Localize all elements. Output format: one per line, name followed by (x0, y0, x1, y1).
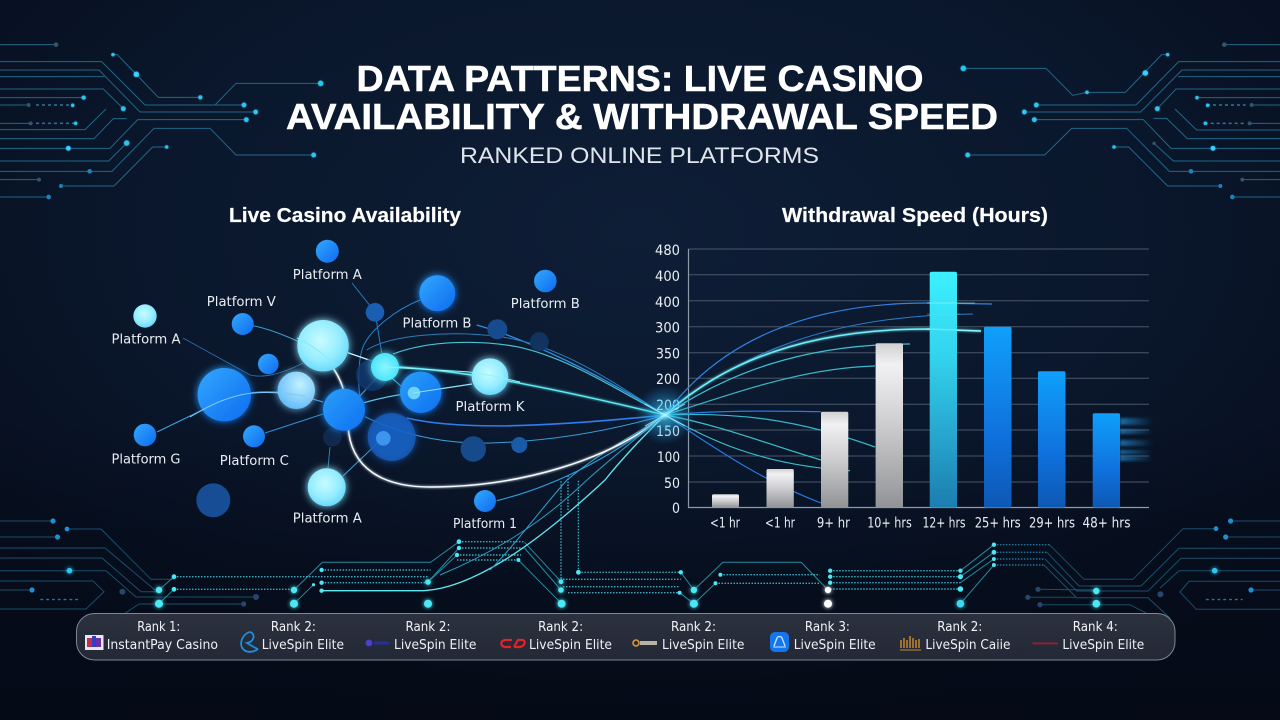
glowing blue nodes (198, 275, 455, 431)
x axis labels: 29+ hrs (1029, 516, 1075, 532)
rank 2: Rank 2: (538, 619, 583, 635)
circuit traces: bottom left and right (0, 518, 1280, 620)
inner node (408, 387, 420, 399)
network nodes (133, 240, 557, 517)
x axis labels: <1 hr (765, 516, 795, 532)
rank 2: Rank 2: (271, 619, 316, 635)
rank 2: Rank 2: (406, 619, 450, 635)
node labels: Platform V (207, 294, 277, 310)
chart curve streams (665, 303, 992, 503)
logo: blue app tile (770, 632, 789, 652)
chart: withdrawal speed bars (655, 243, 1153, 532)
hub-to-trace glowing lines (322, 415, 665, 591)
rank 4: LiveSpin Elite (1062, 637, 1144, 653)
x axis labels: 9+ hr (817, 516, 850, 532)
node labels: Platform G (112, 452, 180, 468)
title: AVAILABILITY & WITHDRAWAL SPEED (286, 96, 998, 137)
x axis labels: <1 hr (710, 516, 740, 532)
rank 2 (366, 619, 476, 653)
small blue nodes (134, 240, 557, 512)
light nodes (278, 320, 508, 506)
chart: platform network (112, 240, 665, 532)
circuit traces: top left (0, 42, 323, 199)
rank 1: Rank 1: (137, 619, 180, 635)
flow curves into hub (333, 325, 665, 501)
rank 3: Rank 3: (805, 619, 850, 635)
rank 4 (1032, 619, 1144, 653)
y axis labels: 200 (656, 372, 680, 388)
bars (712, 272, 1120, 508)
y axis labels: 400 (655, 269, 680, 285)
rank 1: InstantPay Casino (107, 637, 218, 653)
y axis labels: 150 (656, 424, 680, 440)
rank 2: LiveSpin Elite (262, 637, 344, 653)
node labels: Platform B (402, 316, 472, 332)
node labels (112, 267, 580, 532)
dim background nodes (196, 303, 549, 517)
heading: withdrawal speed: Withdrawal Speed (Hours) (782, 205, 1048, 227)
rank 2: LiveSpin Elite (529, 637, 612, 653)
node labels: Platform A (293, 267, 363, 283)
x axis labels: 48+ hrs (1082, 516, 1130, 532)
rank 2: LiveSpin Caiie (925, 637, 1010, 653)
rank 2 (241, 619, 344, 653)
y axis labels: 200 (656, 398, 680, 414)
rank bar panel (76, 614, 1175, 660)
logo: orange mark (633, 640, 657, 646)
logo: gold mark (900, 636, 921, 650)
logo: InstantPay (85, 635, 104, 650)
rank 2 (633, 619, 744, 653)
y axis labels: 50 (664, 476, 680, 492)
node labels: Platform C (220, 453, 289, 469)
subtitle: RANKED ONLINE PLATFORMS (460, 143, 819, 168)
y axis labels: 300 (655, 320, 680, 336)
logo: violet mark (366, 640, 389, 646)
rank 2: Rank 2: (937, 619, 982, 635)
flat light node (133, 304, 157, 328)
chart grid (688, 249, 1149, 508)
y axis labels: 350 (656, 346, 680, 362)
x axis labels: 10+ hrs (867, 516, 912, 532)
x axis labels: 25+ hrs (975, 516, 1021, 532)
x axis labels: 12+ hrs (922, 516, 966, 532)
node labels: Platform K (456, 399, 526, 415)
y axis labels: 0 (672, 501, 680, 517)
rank 2 (900, 619, 1010, 653)
rank 2: LiveSpin Elite (662, 637, 744, 653)
circuit traces: top right (961, 42, 1280, 199)
logo: red wordmark (1032, 642, 1058, 644)
fading streaks beside last bar (1120, 418, 1153, 461)
y axis labels: 400 (655, 295, 680, 311)
logo: blue swirl (241, 632, 258, 652)
rank connector nodes (155, 579, 1100, 608)
rank 4: Rank 4: (1073, 619, 1118, 635)
node labels: Platform B (511, 296, 580, 312)
y axis labels (655, 243, 680, 517)
x axis labels (710, 516, 1130, 532)
overlay links on nodes (190, 338, 520, 417)
y axis labels: 480 (655, 243, 680, 259)
network links (157, 283, 472, 476)
title (286, 58, 998, 168)
bar light streaks (927, 303, 981, 331)
rank 3: LiveSpin Elite (794, 637, 876, 653)
node labels: Platform 1 (453, 516, 517, 532)
rank 2: LiveSpin Elite (394, 637, 476, 653)
title: DATA PATTERNS: LIVE CASINO (356, 58, 924, 99)
rank 2: Rank 2: (671, 619, 716, 635)
circuit traces: connectors above rank bar (159, 475, 1049, 604)
node labels: Platform A (112, 332, 181, 348)
rank 2 (501, 619, 612, 653)
logo: red mark (501, 640, 525, 647)
rank 3 (770, 619, 876, 653)
hub glow (635, 385, 695, 445)
node labels: Platform A (293, 510, 363, 526)
y axis labels: 100 (657, 450, 680, 466)
rank 1 (85, 619, 218, 653)
heading: live casino availability: Live Casino Availability (229, 205, 462, 227)
